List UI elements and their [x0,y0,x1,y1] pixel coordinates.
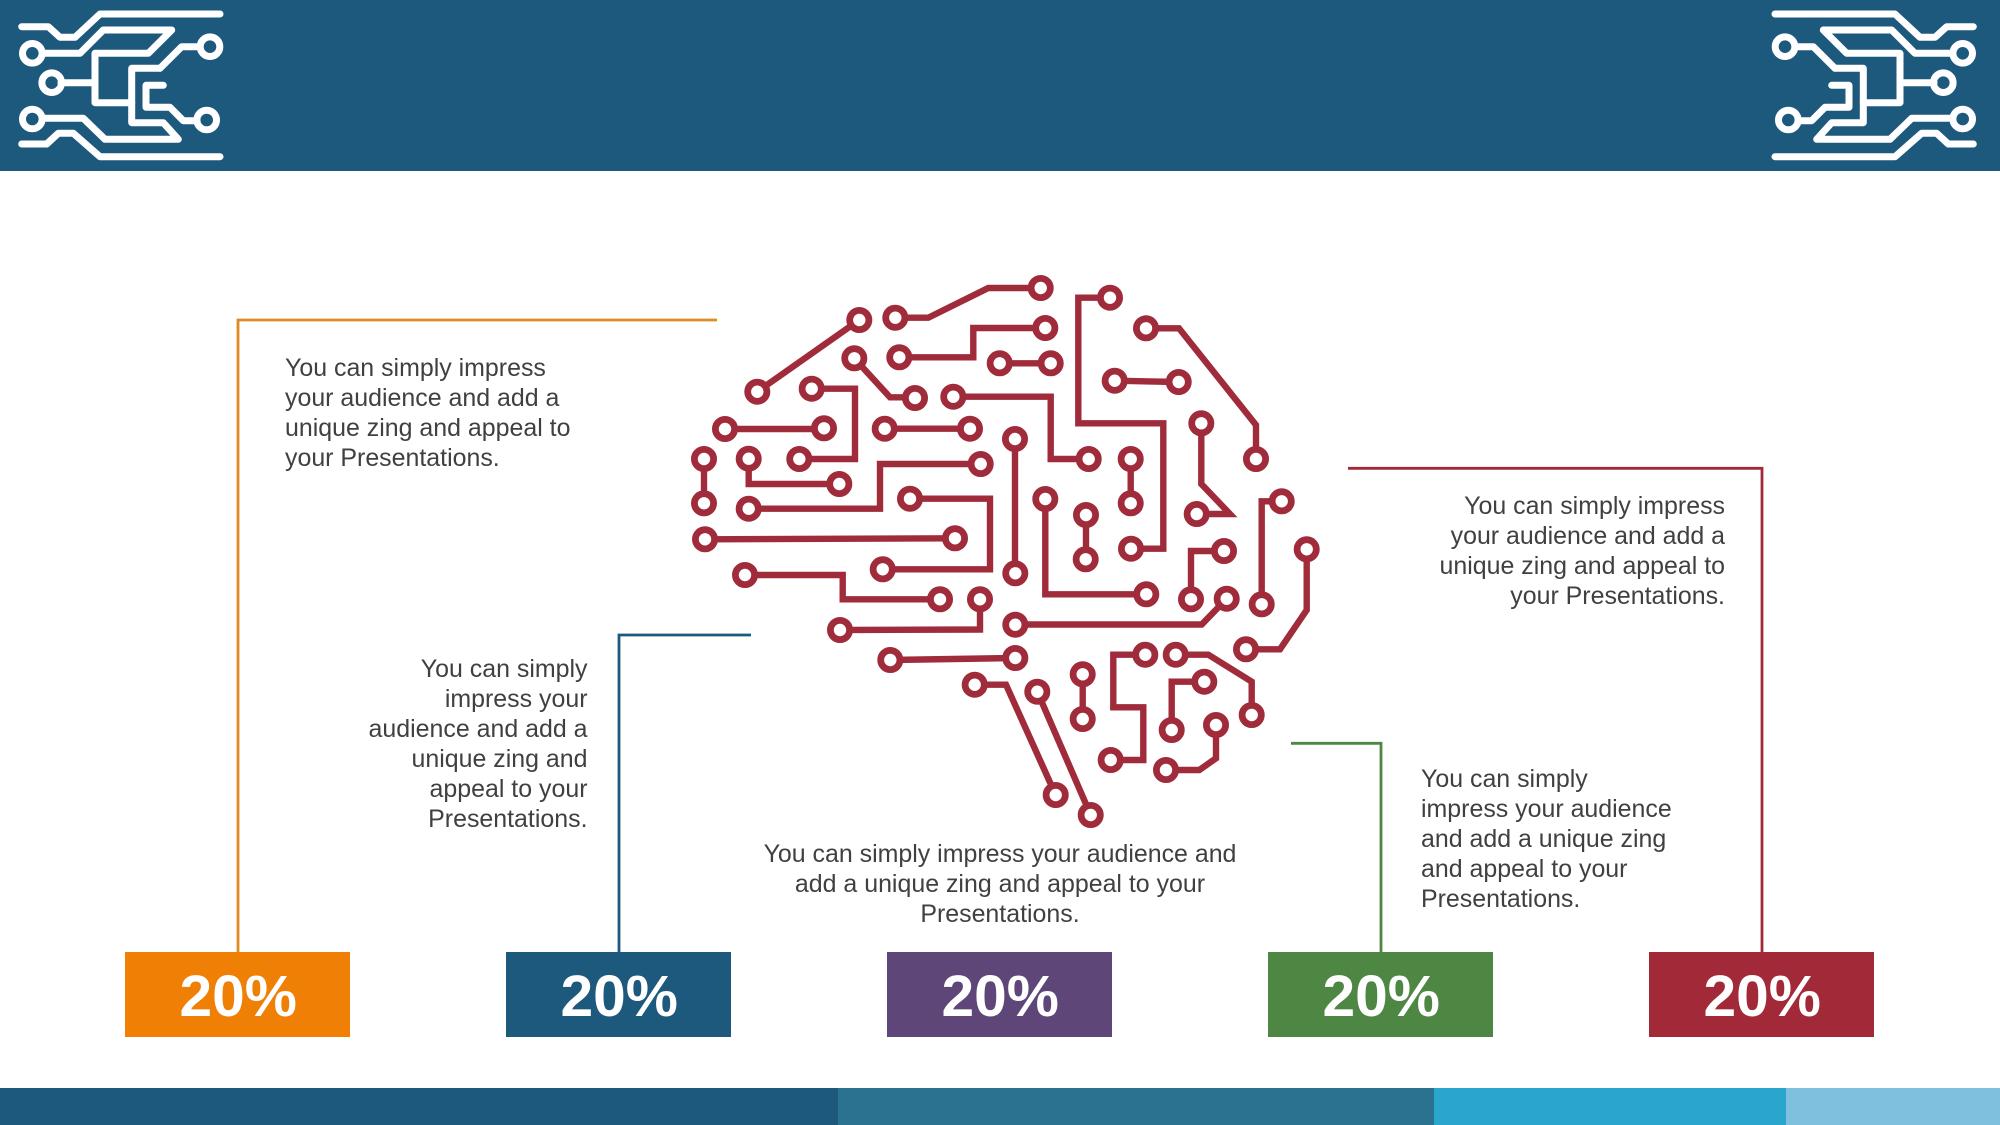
text block: red [1440,492,1725,610]
text block: orange: unique zing and appeal to [285,414,570,442]
text block: green: impress your audience [1421,795,1672,823]
text block: orange: You can simply impress [285,354,546,382]
text block: orange: your audience and add a [285,384,559,412]
text block: red: your Presentations. [1510,582,1725,610]
text block: green [1421,765,1672,913]
brain circuit illustration [694,278,1316,825]
text block: blue: Presentations. [428,805,588,833]
stat box: blue [506,952,731,1037]
text block: green: You can simply [1421,765,1588,793]
footer band [0,1088,2000,1125]
text block: orange: your Presentations. [285,444,500,472]
text block: orange [285,354,570,472]
stat box: blue: 20% [561,964,678,1028]
text block: green: and add a unique zing [1421,825,1666,853]
text block: blue: impress your [445,685,588,713]
icon: circuit left [22,14,220,157]
stat box: orange [125,952,350,1037]
connector: red [1348,468,1762,952]
header band [0,0,2000,171]
text block: blue [369,655,588,833]
text block: red: You can simply impress [1464,492,1725,520]
text block: green: Presentations. [1421,885,1580,913]
text block: purple: add a unique zing and appeal to your [795,870,1205,898]
stat box: red [1649,952,1874,1037]
text block: blue: You can simply [421,655,588,683]
stat box: red: 20% [1704,964,1821,1028]
stat box: purple: 20% [942,964,1059,1028]
text block: red: your audience and add a [1451,522,1725,550]
text block: purple: Presentations. [920,900,1080,928]
text block: blue: audience and add a [369,715,588,743]
text block: blue: appeal to your [430,775,588,803]
text block: blue: unique zing and [412,745,588,773]
stat box: orange: 20% [180,964,297,1028]
stat box: green [1268,952,1493,1037]
text block: purple: You can simply impress your audience and [764,840,1236,868]
icon: circuit right [1775,14,1973,157]
text block: red: unique zing and appeal to [1440,552,1725,580]
text block: purple [764,840,1236,928]
text block: green: and appeal to your [1421,855,1627,883]
connector: orange [238,320,717,952]
stat box: green: 20% [1323,964,1440,1028]
connector: green [1291,743,1381,952]
stat box: purple [887,952,1112,1037]
connector: blue [619,635,751,952]
